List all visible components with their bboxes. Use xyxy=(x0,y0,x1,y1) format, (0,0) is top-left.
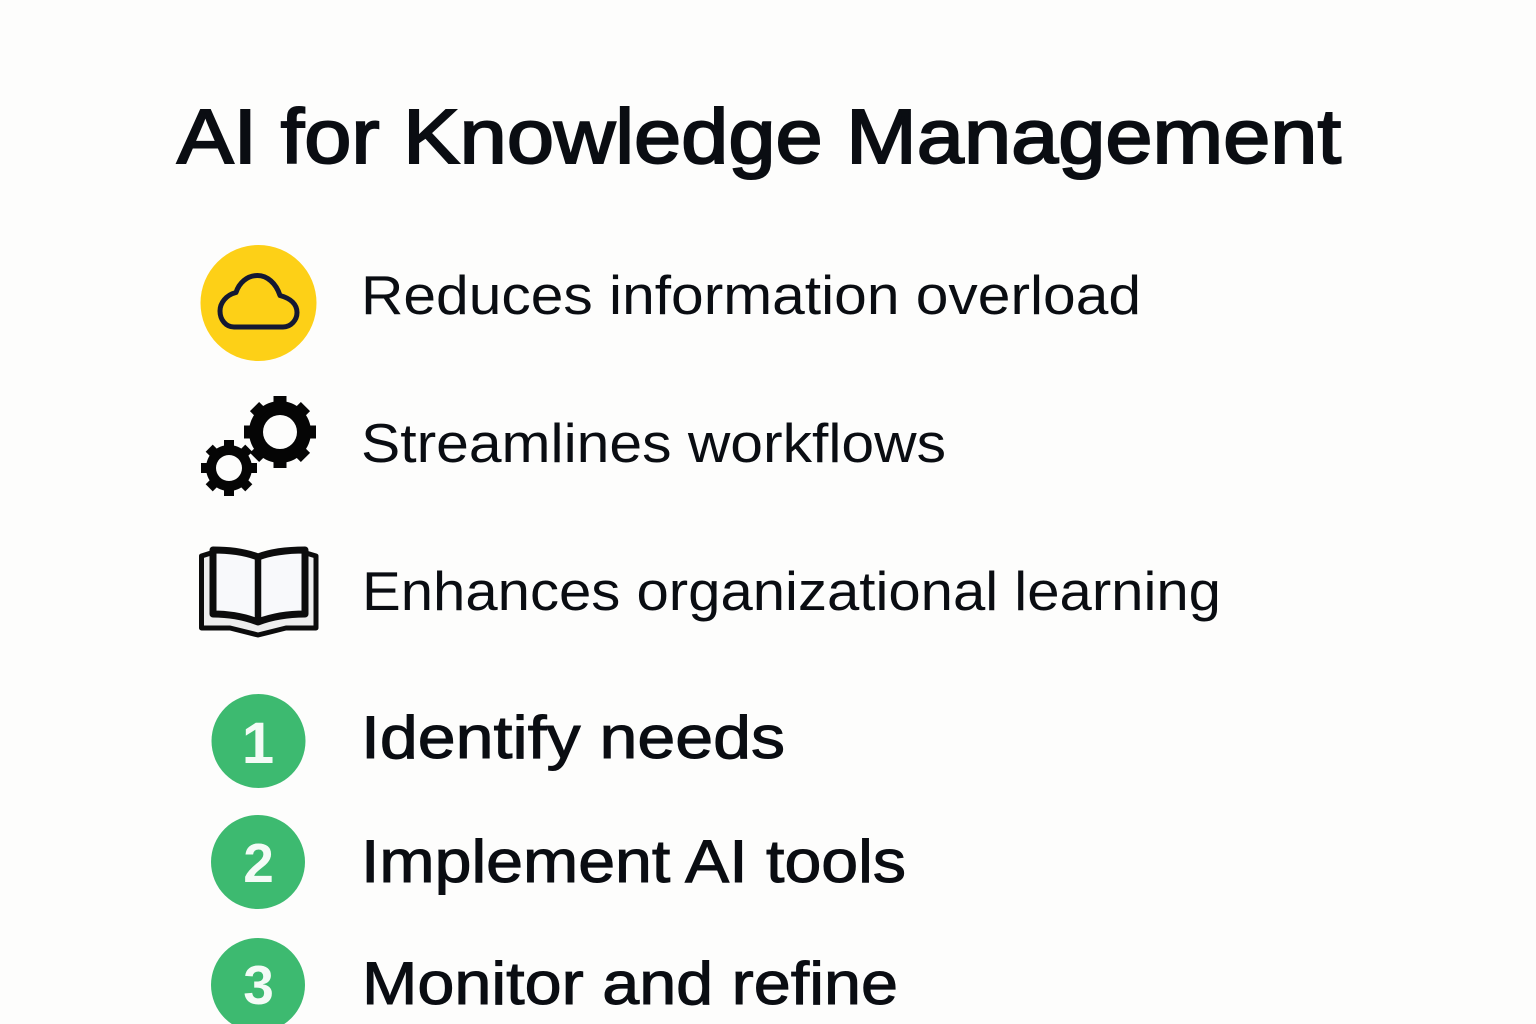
badge: 2 xyxy=(211,815,305,909)
icon: cloud on yellow circle xyxy=(200,245,316,361)
large gear xyxy=(244,396,316,468)
step 1 xyxy=(212,694,785,788)
label: Streamlines workflows xyxy=(361,412,946,474)
badge: 3: 3 xyxy=(243,954,274,1016)
benefit: reduces information overload xyxy=(200,245,1141,361)
title: AI for Knowledge Management xyxy=(177,94,1341,180)
badge: 3 xyxy=(211,938,305,1024)
step 2 xyxy=(211,815,906,909)
label: Monitor and refine xyxy=(362,950,898,1017)
icon: open book xyxy=(202,550,316,635)
badge: 1: 1 xyxy=(242,711,274,776)
benefit: streamlines workflows xyxy=(201,396,946,496)
label: Implement AI tools xyxy=(361,828,906,895)
label: Identify needs xyxy=(361,704,785,771)
icon: gears xyxy=(201,396,316,496)
small gear xyxy=(201,440,257,496)
step 3 xyxy=(211,938,898,1024)
label: Reduces information overload xyxy=(361,264,1141,326)
label: Enhances organizational learning xyxy=(362,560,1221,622)
badge: 2: 2 xyxy=(243,832,274,894)
badge: 1 xyxy=(212,694,306,788)
benefit: enhances organizational learning xyxy=(202,550,1221,635)
